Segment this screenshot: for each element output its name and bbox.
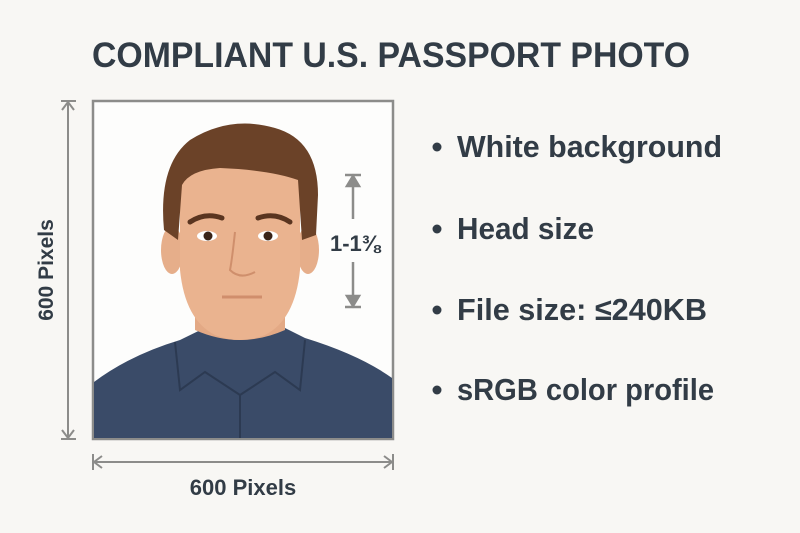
hair [163, 124, 318, 240]
nose & mouth [230, 232, 255, 276]
bullet list: sRGB color profile [457, 372, 714, 407]
bullet list [432, 129, 722, 407]
bottom dimension arrow [93, 454, 393, 470]
bullet list: White background [457, 129, 722, 164]
eyes [197, 231, 217, 241]
bottom label: 600 Pixels [190, 475, 296, 500]
collar [175, 340, 305, 395]
photo frame [93, 101, 393, 439]
left dimension arrow [61, 101, 76, 439]
bullet list: Head size [457, 211, 594, 246]
ears [161, 226, 183, 274]
eyebrows [190, 216, 222, 222]
head size arrow [345, 175, 361, 307]
neck [195, 310, 285, 340]
title: COMPLIANT U.S. PASSPORT PHOTO [92, 36, 690, 75]
head size label: 1-1⅜ [330, 231, 382, 256]
shirt [94, 318, 392, 438]
left label: 600 Pixels [35, 219, 58, 321]
face [180, 162, 300, 340]
bullet list: File size: ≤240KB [457, 292, 707, 327]
